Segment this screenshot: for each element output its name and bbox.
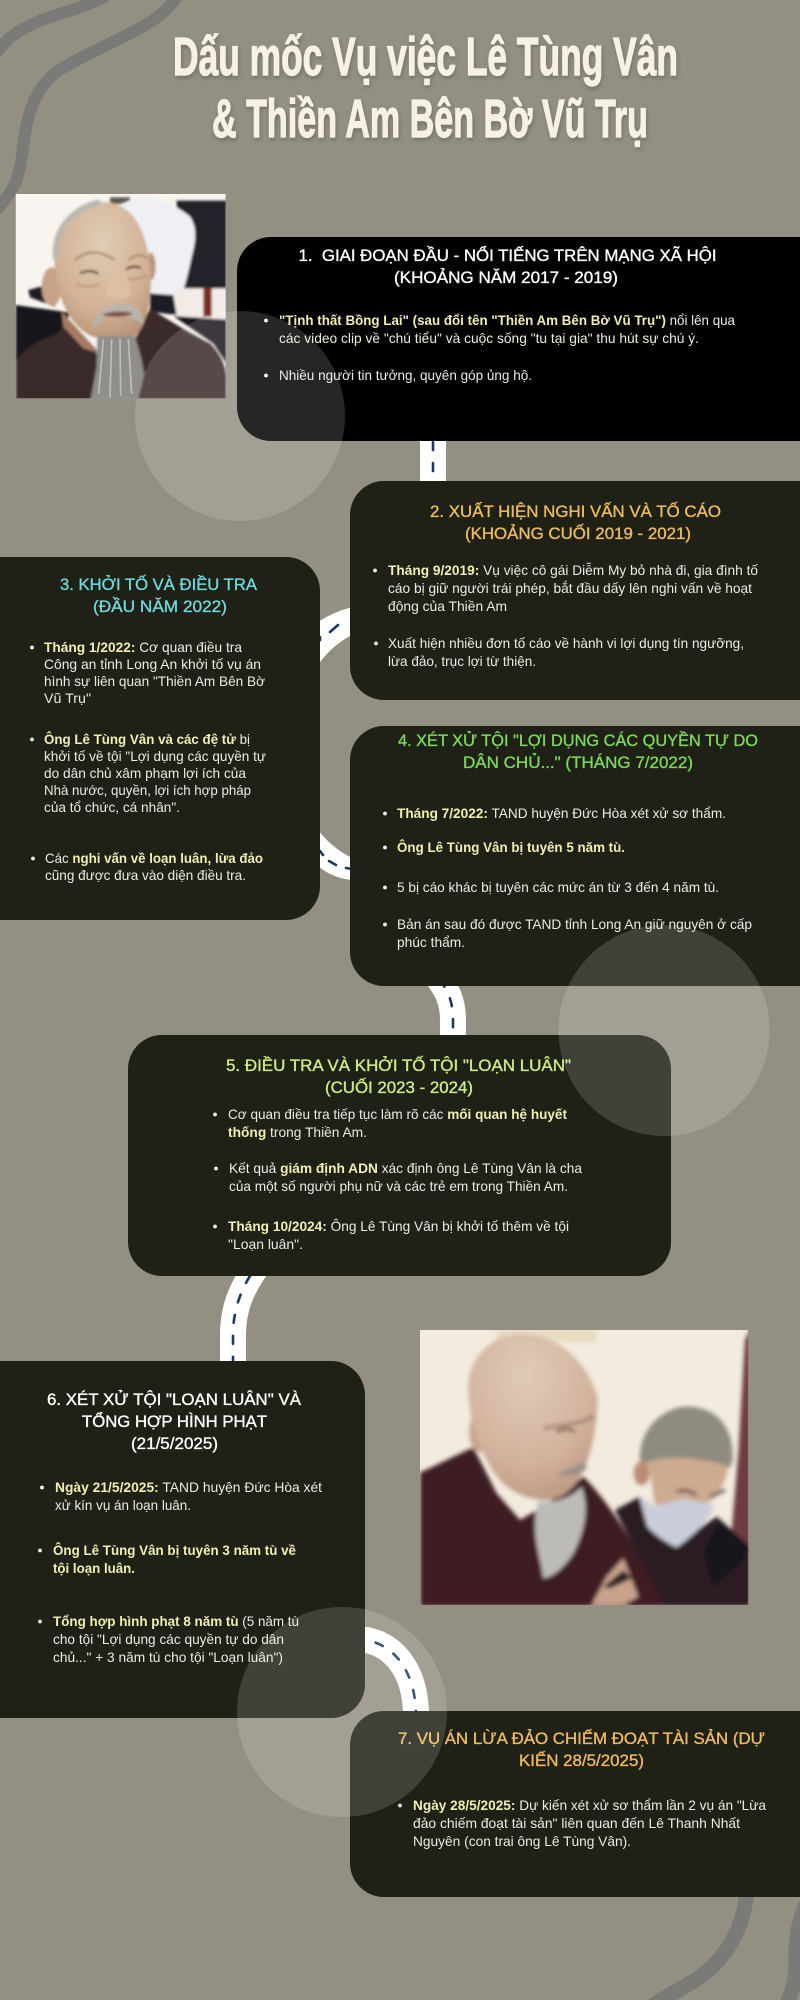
road: panel 5 to panel 6 [233,1265,258,1370]
bullet: charges: Nhà nước, quyền, lợi ích hợp pháp [44,783,251,798]
bullet: 21 May 2025: xử kín vụ án loạn luân. [55,1498,191,1513]
bullet: charges: của tổ chức, cá nhân". [44,800,180,815]
heading: panel 4: 4. XÉT XỬ TỘI "LỢI DỤNG CÁC QUYỀN TỰ DO [398,731,758,750]
bullet: January 2022 [30,640,265,706]
bullet: 28 May 2025: đảo chiếm đoạt tài sản" liên quan đến Lê Thanh Nhất [413,1816,740,1831]
bullet: appeal: Bản án sau đó được TAND tỉnh Long An giữ nguyên ở cấp [397,917,752,932]
bullet: January 2022: Công an tỉnh Long An khởi tố vụ án [44,657,261,672]
heading: panel 6 [47,1390,301,1453]
bullet: other defendants: 5 bị cáo khác bị tuyên các mức án từ 3 đến 4 năm tù. [397,880,719,895]
bullet: Tịnh thất Bồng Lai: "Tịnh thất Bồng Lai" (sau đổi tên "Thiền Am Bên Bờ Vũ Trụ") nổi lên qua [279,313,735,328]
decorative translucent circle: near panels 6 and 7 [237,1607,447,1817]
bullet: 3-year sentence [38,1541,296,1576]
heading: panel 5: 5. ĐIỀU TRA VÀ KHỞI TỐ TỘI "LOẠN LUÂN" [226,1055,571,1075]
bullet: blood relations [213,1107,567,1140]
bullet: combined 8-year sentence: cho tội "Lợi dụng các quyền tự do dân [53,1632,284,1647]
bullet: appeal [383,917,752,950]
decorative translucent circle: near panel 1 [135,311,345,521]
bullet: September 2019 [373,562,758,614]
heading: panel 1: 1. GIAI ĐOẠN ĐẦU - NỔI TIẾNG TRÊN MẠNG XÃ HỘI [298,245,716,265]
heading: panel 6: 6. XÉT XỬ TỘI "LOẠN LUÂN" VÀ [47,1390,301,1409]
bullet: blood relations: Cơ quan điều tra tiếp tục làm rõ các mối quan hệ huyết [228,1107,567,1122]
bullet: DNA: Kết quả giám định ADN xác định ông Lê Tùng Vân là cha [229,1161,582,1176]
bullet: 21 May 2025: Ngày 21/5/2025: TAND huyện Đức Hòa xét [55,1480,322,1495]
bullet: charges: Ông Lê Tùng Vân và các đệ tử bị [44,730,250,747]
road: upper bend between panels 2 and 3 [318,607,352,665]
road: panel 4 to panel 5 [436,975,453,1040]
bullet: January 2022: hình sự liên quan "Thiền Am Bên Bờ [44,674,265,689]
bullet: DNA: của một số người phụ nữ và các trẻ em trong Thiền Am. [229,1179,568,1194]
bullet: complaints: lừa đảo, trục lợi từ thiện. [388,654,536,669]
panel 3: prosecution and investigation [0,557,320,920]
heading: panel 4 [398,731,758,772]
photo: Lê Tùng Vân with young disciple [420,1329,751,1607]
road: panel 6 to panel 7 [355,1639,416,1716]
decorative translucent circle: near panels 4 and 5 [558,925,770,1136]
panel 5: incest investigation [128,1035,671,1276]
road: panel 1 to panel 2 [420,435,446,486]
heading: panel 2: 2. XUẤT HIỆN NGHI VẤN VÀ TỐ CÁO [430,501,721,521]
heading: panel 7: KIẾN 28/5/2025) [519,1751,644,1770]
bullet: other suspicions [31,851,263,883]
bullet: DNA [214,1161,582,1194]
heading: panel 2 [430,501,721,543]
heading: panel 2: (KHOẢNG CUỐI 2019 - 2021) [465,523,691,543]
bullet: 3-year sentence: Ông Lê Tùng Vân bị tuyên 3 năm tù về [53,1541,296,1558]
bullet: October 2024: Tháng 10/2024: Ông Lê Tùng Vân bị khởi tố thêm về tội [228,1218,569,1234]
decorative squiggle: bottom right [652,1890,800,2000]
bullet: complaints: Xuất hiện nhiều đơn tố cáo về hành vi lợi dụng tín ngưỡng, [388,636,744,651]
bullet: Tịnh thất Bồng Lai: các video clip về "chú tiểu" và cuộc sống "tu tại gia" thu hút sự chú ý. [279,331,699,346]
bullet: 3-year sentence: tội loạn luân. [53,1561,135,1576]
bullet: donations: Nhiều người tin tưởng, quyên góp ủng hộ. [279,368,532,383]
road: lower bend between panels 3 and 4 [318,830,352,880]
heading: panel 3: (ĐẦU NĂM 2022) [93,597,227,616]
heading: panel 6: (21/5/2025) [131,1435,218,1453]
panel 1: early stage [237,237,800,441]
bullet: combined 8-year sentence [38,1614,299,1665]
bullet: 28 May 2025: Nguyên (con trai ông Lê Tùng Vân). [413,1834,631,1849]
bullet: combined 8-year sentence: chủ..." + 3 năm tù cho tội "Loạn luân") [53,1650,283,1665]
bullet: other suspicions: cũng được đưa vào diện điều tra. [45,868,246,883]
bullet: October 2024: "Loạn luân". [228,1237,303,1252]
bullet: 5-year sentence: Ông Lê Tùng Vân bị tuyên 5 năm tù. [397,838,625,855]
panel 6: incest trial and combined sentence [0,1361,365,1718]
bullet: January 2022: Tháng 1/2022: Cơ quan điều tra [44,640,242,655]
bullet: July 2022: Tháng 7/2022: TAND huyện Đức Hòa xét xử sơ thẩm. [397,806,726,821]
heading: panel 1 [298,245,716,287]
title [173,27,678,149]
bullet: blood relations: thống trong Thiền Am. [228,1125,367,1140]
bullet: complaints [374,636,744,669]
bullet: September 2019: Tháng 9/2019: Vụ việc cô gái Diễm My bỏ nhà đi, gia đình tố [388,562,758,578]
decorative squiggle: top left [0,0,177,210]
bullet: September 2019: cáo bị giữ người trái phép, bắt đầu dấy lên nghi vấn về hoạt [388,580,752,596]
heading: panel 3: 3. KHỞI TỐ VÀ ĐIỀU TRA [60,574,257,594]
bullet: October 2024 [213,1218,569,1252]
panel 4: trial for abusing democratic freedoms [350,726,800,986]
bullet: charges: khởi tố về tội "Lợi dụng các quyền tự [44,749,266,764]
bullet: 21 May 2025 [40,1480,322,1513]
bullet: other suspicions: Các nghi vấn về loạn luân, lừa đảo [45,851,263,866]
heading: panel 3 [60,574,257,616]
panel 2: suspicion and complaints [350,481,800,700]
bullet: 28 May 2025 [398,1798,766,1849]
bullet: combined 8-year sentence: Tổng hợp hình phạt 8 năm tù (5 năm tù [53,1614,299,1629]
bullet: charges: do dân chủ xâm phạm lợi ích của [44,766,246,781]
heading: panel 5: (CUỐI 2023 - 2024) [325,1077,473,1097]
panel 7: fraud case [350,1711,800,1897]
heading: panel 5 [226,1055,571,1097]
heading: panel 6: TỔNG HỢP HÌNH PHẠT [82,1412,267,1431]
bullet: appeal: phúc thẩm. [397,935,465,950]
bullet: January 2022: Vũ Trụ" [44,691,91,706]
bullet: Tịnh thất Bồng Lai [264,313,735,346]
heading: panel 7 [398,1729,765,1770]
photo: Lê Tùng Vân portrait [16,194,227,400]
bullet: 28 May 2025: Ngày 28/5/2025: Dự kiến xét xử sơ thẩm lần 2 vụ án "Lừa [413,1798,766,1813]
bullet: September 2019: động của Thiền Am [388,599,507,614]
heading: panel 1: (KHOẢNG NĂM 2017 - 2019) [394,268,618,287]
heading: panel 4: DÂN CHỦ..." (THÁNG 7/2022) [463,753,693,772]
bullet: charges [30,730,266,815]
heading: panel 7: 7. VỤ ÁN LỪA ĐẢO CHIẾM ĐOẠT TÀI SẢN (DỰ [398,1729,765,1748]
